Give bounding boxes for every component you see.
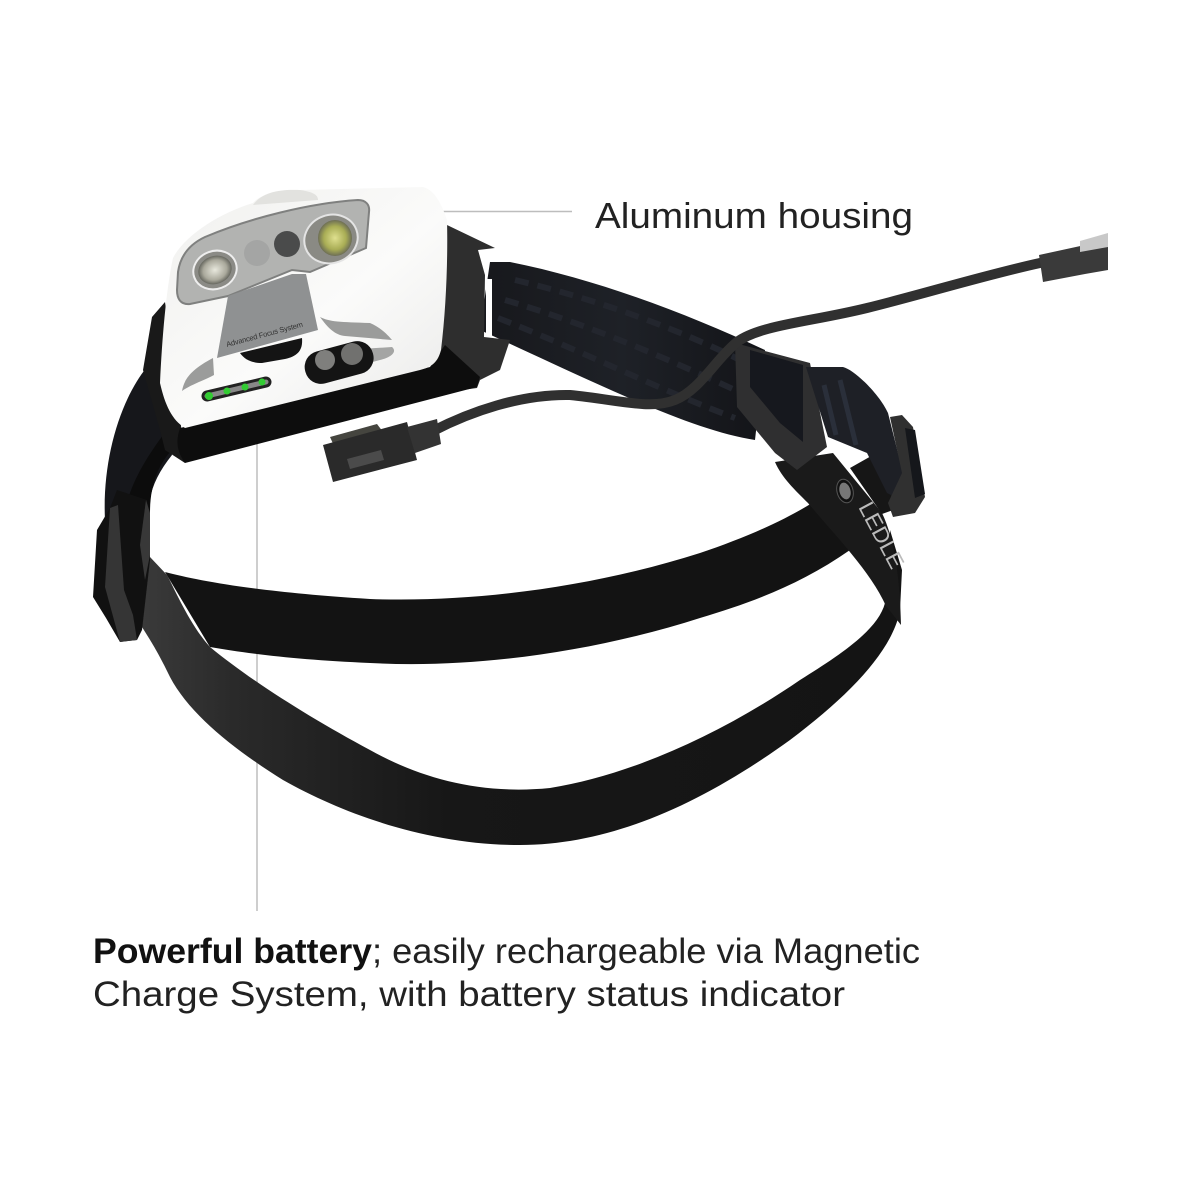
lower front strap band — [142, 530, 902, 845]
white aluminum housing — [160, 187, 447, 428]
dark sensor — [274, 231, 300, 257]
housing underside — [177, 345, 480, 463]
gray left swoosh — [182, 358, 214, 391]
label: powerful battery: ; easily rechargeable via Magnetic — [372, 932, 920, 971]
charge cable — [433, 263, 1040, 431]
charge cable end sleeve — [1039, 233, 1108, 282]
right lens — [297, 207, 365, 271]
button cluster — [301, 337, 394, 387]
headlamp illustration — [93, 187, 1108, 845]
white strap slit — [486, 279, 492, 336]
leader line: aluminum housing — [435, 210, 572, 212]
fabric rear loops and buckle — [735, 343, 925, 517]
left strap buckle — [93, 490, 150, 642]
top bump — [253, 190, 318, 205]
gray right swoosh — [320, 317, 392, 340]
left fabric strap — [105, 367, 177, 600]
left lens — [188, 245, 242, 295]
label: powerful battery: Powerful battery — [93, 932, 373, 971]
label: aluminum housing: Aluminum housing — [595, 195, 913, 236]
right housing bracket — [425, 225, 510, 393]
battery status LEDs — [205, 378, 266, 400]
lens panel — [177, 200, 369, 304]
logo rivet — [834, 477, 856, 505]
leader line: battery — [256, 440, 258, 911]
rear strap band — [165, 503, 850, 664]
focus dial — [240, 338, 302, 363]
label: powerful battery — [93, 932, 920, 1014]
left housing bracket — [143, 302, 185, 463]
light sensor — [244, 240, 270, 266]
pivot arm — [850, 455, 893, 514]
magnetic connector — [323, 419, 441, 482]
label: powerful battery: Charge System, with battery status indicator — [93, 975, 845, 1014]
gray focus slider — [217, 274, 318, 358]
Ledlenser printed strap end — [775, 453, 909, 625]
fabric top strap — [480, 262, 765, 440]
focus system label: Advanced Focus System — [225, 320, 304, 349]
strap logo text: LEDLE — [854, 498, 909, 573]
